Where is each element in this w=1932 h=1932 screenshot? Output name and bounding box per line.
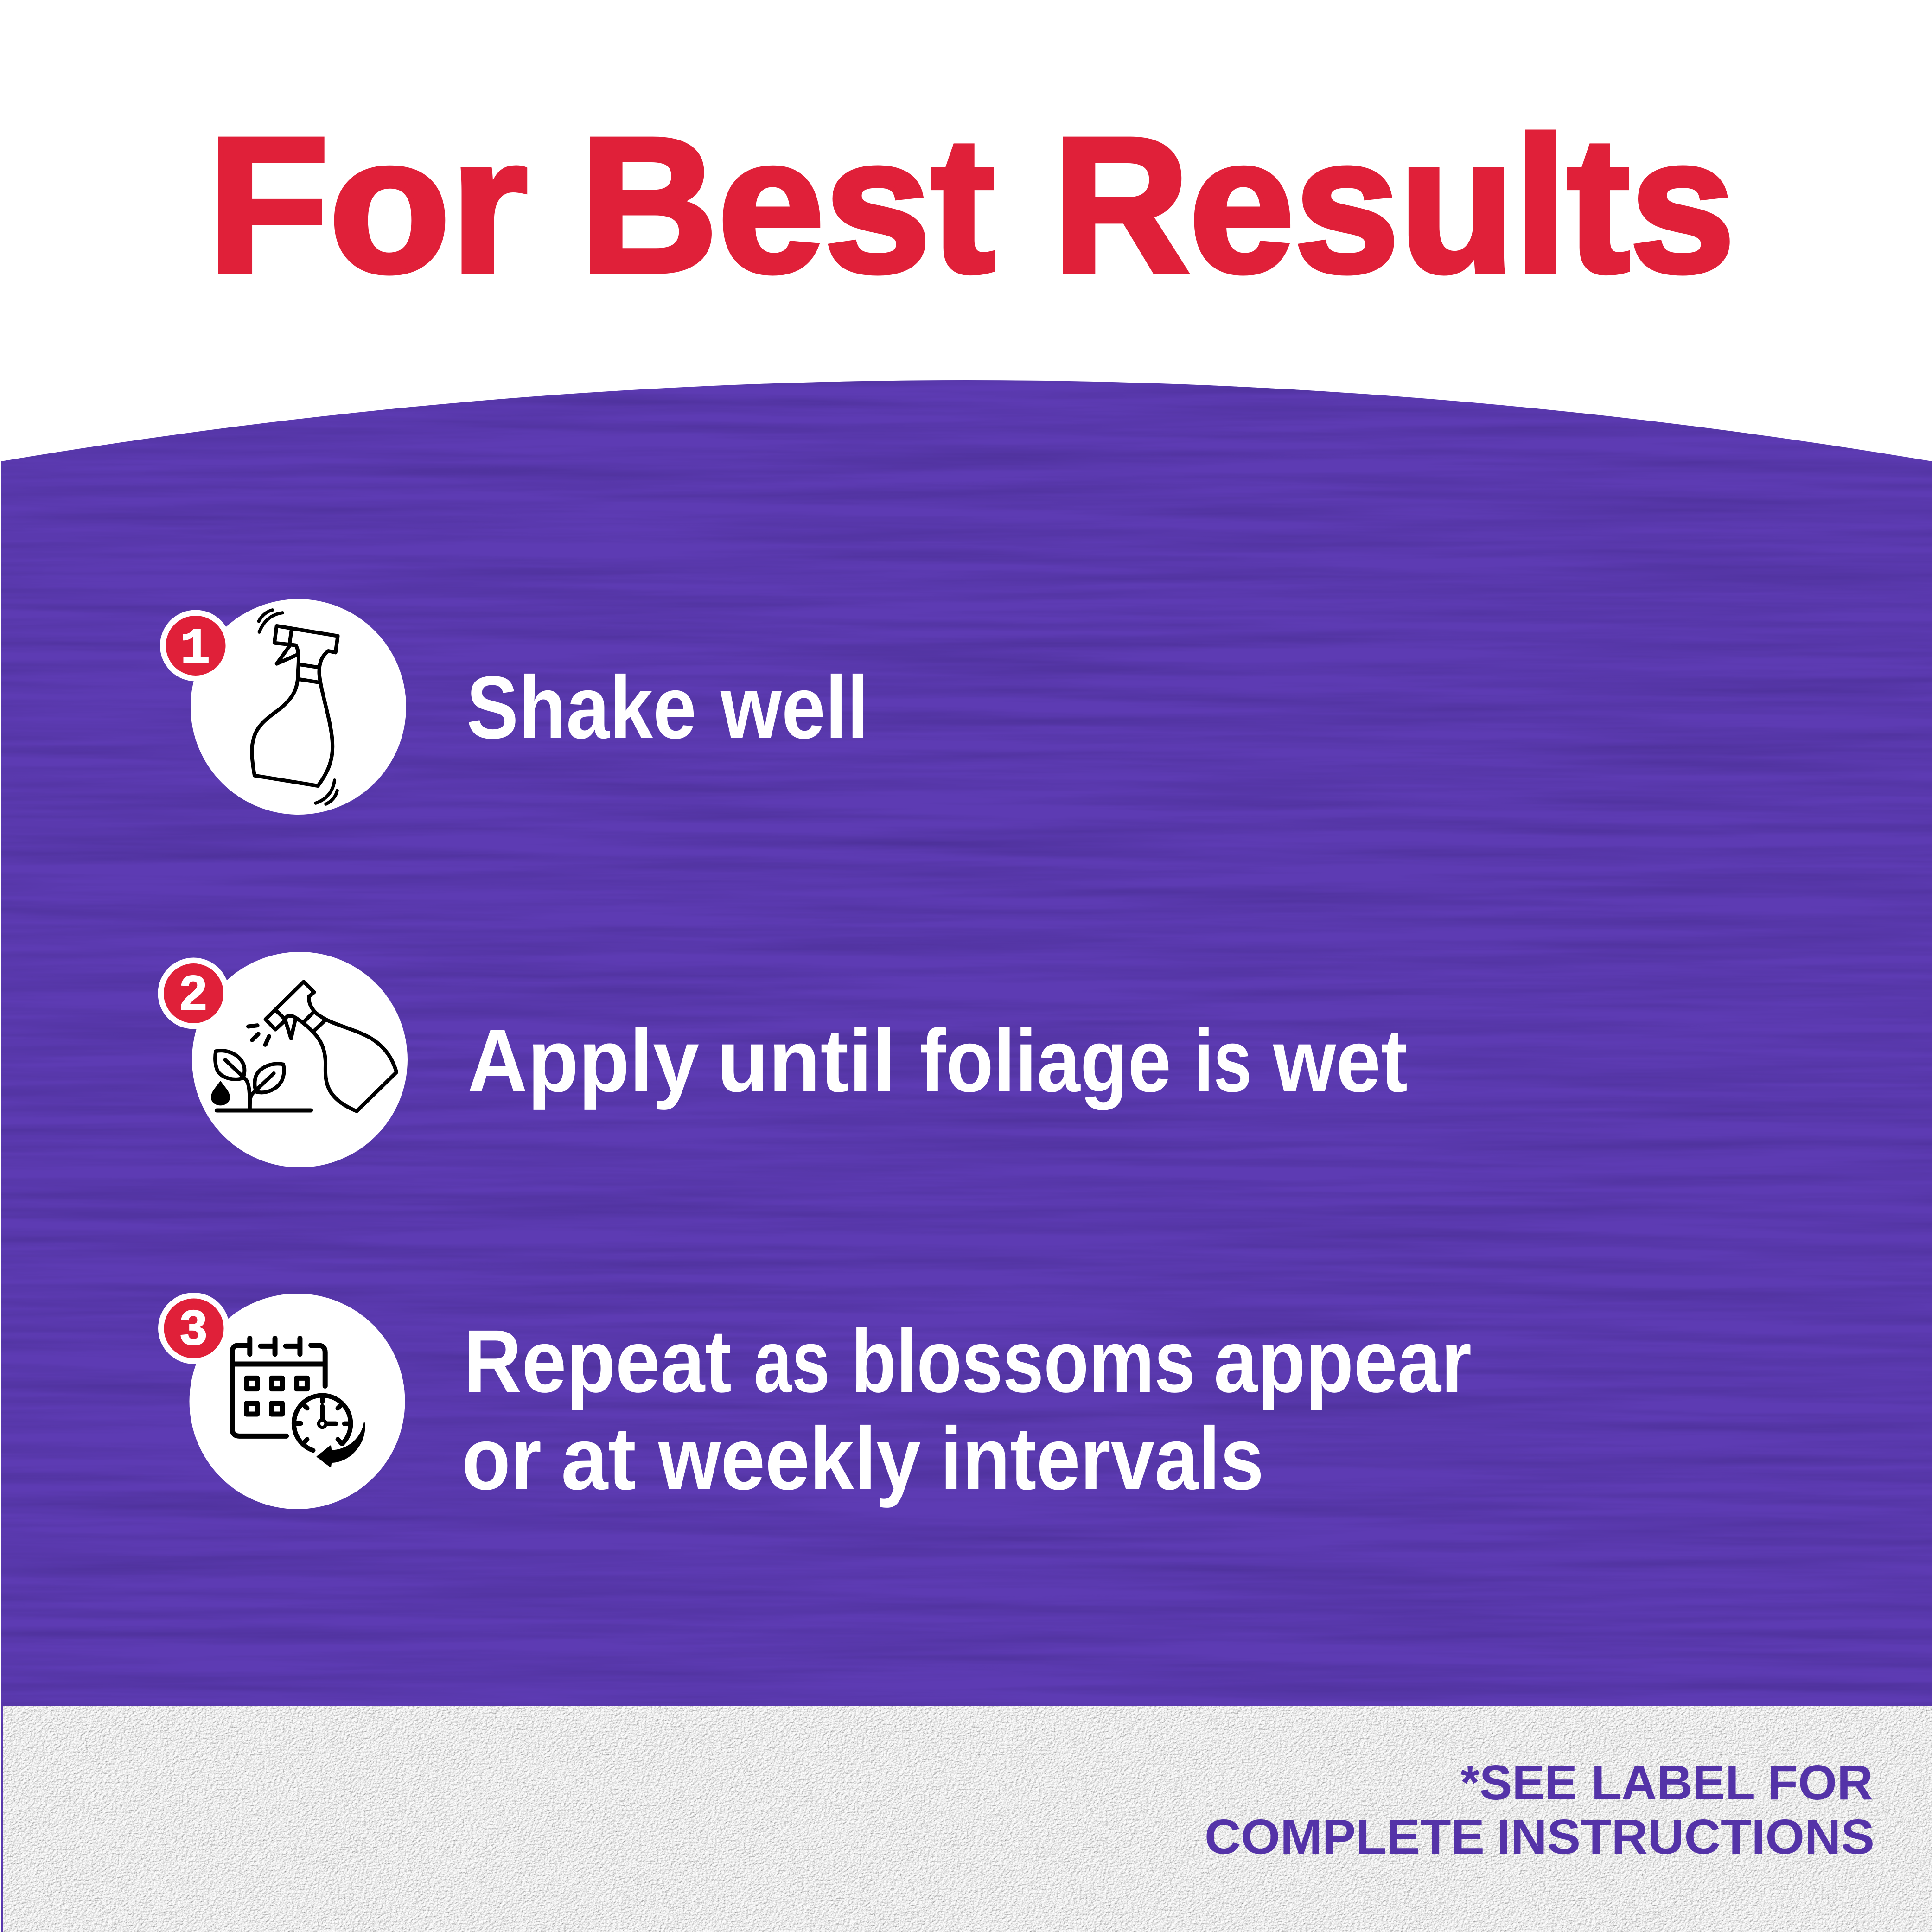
badge: number 3: 3 [180,1301,207,1355]
step 3 text: Repeat [464,1311,732,1411]
step 2 text: is [1194,1011,1252,1110]
step 3 text [462,1311,1472,1508]
step 3 text: appear [1214,1311,1472,1411]
footnote: see label: INSTRUCTIONS [1497,1810,1875,1864]
badge: number 3 [158,1293,230,1364]
step 2 [158,952,408,1167]
badge: number 1: 1 [180,621,210,677]
step 1 text: Shake [466,657,696,757]
footnote: see label: *SEE [1460,1755,1577,1810]
step 2 text: Apply [467,1011,699,1110]
step 3 text: intervals [940,1409,1264,1508]
step 3 text: blossoms [851,1311,1195,1411]
icon: calendar with clock and return arrow [232,1339,364,1467]
step 2 text: wet [1273,1011,1408,1110]
icon circle 3 [189,1294,405,1509]
step 3 text: weekly [658,1409,921,1508]
step 2 text: foliage [920,1011,1171,1110]
badge: number 2: 2 [180,966,207,1020]
step 3 text: at [561,1409,636,1508]
badge: number 1 [160,610,231,682]
icon circle 1 [191,599,406,815]
step 1 [160,599,406,815]
step 2 text [467,1011,1408,1110]
panel: grey plaster footer [3,1706,1932,1932]
footnote: see label: COMPLETE [1205,1810,1485,1864]
title: For Best Results: Best [580,97,995,312]
icon: spray bottle being shaken [252,610,338,804]
step 3 [158,1293,405,1509]
icon circle 2 [192,952,408,1167]
footnote: see label: FOR [1767,1755,1873,1810]
footnote: see label [1205,1755,1875,1864]
step 3 text: as [754,1311,830,1411]
title: For Best Results: For [208,97,528,312]
step 2 text: until [717,1011,896,1110]
step 3 text: or [462,1409,542,1508]
step 1 text: well [720,657,869,757]
title: For Best Results: Results [1053,97,1735,312]
title: For Best Results [208,97,1735,312]
icon: spraying a plant [211,982,396,1111]
footnote: see label: LABEL [1591,1755,1755,1810]
step 1 text [466,657,869,757]
badge: number 2 [158,958,229,1029]
